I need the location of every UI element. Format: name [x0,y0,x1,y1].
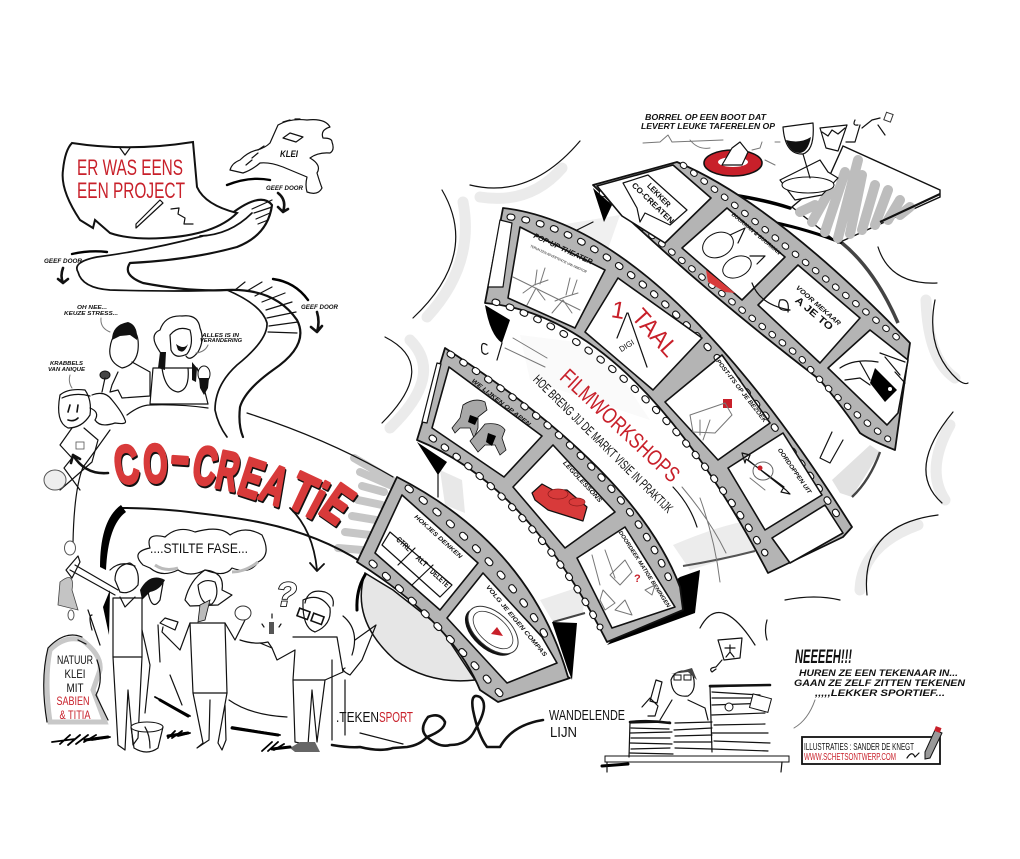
map of the netherlands: KLEI [280,149,298,159]
borrel on boat text and lifebuoy: LEVERT LEUKE TAFERELEN OP [641,122,776,131]
film strip 1: hokjes denken and compas [357,477,577,702]
borrel on boat text and lifebuoy: BORREL OP EEN BOOT DAT [645,113,767,122]
frame: volg je eigen compas [447,573,557,683]
labels near top people: OH NEE... [77,305,108,311]
heading: co-creatie: i [299,472,336,530]
anique figure [44,390,126,543]
frame: hokjes denken ctrl alt delete [375,495,478,610]
wandering line [332,696,543,750]
map of the netherlands [230,119,333,193]
neeeeh text block: HUREN ZE EEN TEKENAAR IN... [799,668,958,678]
frame: we lijken op apen [432,367,542,477]
heading: co-creatie: O [142,434,169,495]
frame: 1 taal digi [585,278,702,390]
top people with microphones [100,316,210,415]
heading: co-creatie [110,425,364,535]
neeeeh text block: ,,,,,LEKKER SPORTIEF... [814,688,945,698]
credits box: WWW.SCHETSONTWERP.COM [804,752,896,763]
heading: co-creatie: - [169,425,192,486]
figure: woman with apron and light bulb [58,541,142,750]
clay sign: natuur klei: & TITIA [60,708,90,722]
neeeeh text block: NEEEEH!!! [795,647,852,668]
paper flag with grey drips [792,146,940,243]
frame: speech bubble lekker co-createn: LEKKER [645,181,673,209]
title: er was eens een project: ER WAS EENS [77,155,183,180]
heading: co-creatie: R [211,440,245,503]
figure: woman behind with dark hair [140,578,165,713]
film strip 4: lekker co-creeren [593,162,910,450]
frame: buurman en buurman: BUURMAN & BUURMAN [730,212,782,257]
arch line and arrow below heading [90,505,363,635]
clay sign: natuur klei [44,635,108,722]
title: er was eens een project: EEN PROJECT [77,178,185,203]
heading: co-creatie: T [279,460,327,526]
geef door labels and arrows: GEEF DOOR [44,259,83,265]
labels near top people: ALLES IS IN [201,333,240,339]
ground strokes [52,610,345,751]
frame: pop-up theater [508,227,605,328]
neeeeh text block: GAAN ZE ZELF ZITTEN TEKENEN [794,678,966,688]
clay sign: natuur klei: SABIEN [56,694,90,708]
geef door labels and arrows: GEEF DOOR [301,305,339,311]
frame: hokjes denken ctrl alt delete: DELETE [428,567,452,590]
label: wandelende lijn [549,707,625,741]
frame: buurman en buurman [682,208,785,300]
brush strokes beside co-creatie [338,458,392,550]
title: er was eens een project [77,155,185,203]
frame: white strip end [772,505,843,563]
frame: lego: LEGOLESSONS [561,461,602,504]
labels near top people: VAN ANIQUE [48,367,85,373]
neeeeh text block [794,647,966,728]
frame: 1 taal digi: DIGI [618,338,636,354]
frame: post-its: POST-ITS OP JE BEZOEK [714,359,768,425]
clay sign: natuur klei: NATUUR [57,653,93,667]
label: wandelende lijn: LIJN [550,724,577,741]
blob body with shading [357,195,898,681]
frame: pop-up theater: POP-UP THEATER [532,231,594,267]
frame: hand with phone [828,330,908,425]
thought cloud: stilte fase: ....STILTE FASE... [150,540,248,556]
frame: doordeek matige bewegingen: ? [634,573,641,585]
heading: co-creatie: C [110,433,143,497]
film strip 3: pop-up theater and 1 taal [485,208,852,573]
background arcs [382,141,968,645]
borrel on boat text and lifebuoy [641,113,780,176]
label: tekensport: .TEKEN [336,709,379,726]
labels near top people: KEUZE STRESS... [64,311,119,317]
frame: lego [513,445,615,548]
labels near top people [48,305,243,388]
frame: oordoppen uit: OORDOPPEN UIT [776,448,813,496]
geef door labels and arrows: GEEF DOOR [266,186,304,192]
frame: speech bubble lekker co-createn: CO-CREATEN [630,181,676,226]
frame: voor mekaar a je to: A JE TO [792,295,835,333]
heading: co-creatie: E [310,473,364,535]
figure: man with glasses and question mark: ? [276,576,297,614]
frame: we lijken op apen: WE LIJKEN OP APEN [470,378,532,429]
subheading: hoe breng jij de markt visie in praktijk: HOE BRENG JIJ DE MARKT VISIE IN PRAKTIJK [530,372,676,516]
frame: 1 taal digi: TAAL [626,304,683,362]
figure: man with glasses and question mark [240,576,376,752]
heading: co-creatie: C [188,435,222,498]
desk with paper stacks and artist [602,638,789,772]
paper scroll [63,142,237,238]
heading: co-creatie: A [253,454,297,518]
thought cloud: stilte fase [138,529,266,574]
credits box: ILLUSTRATIES : SANDER DE KNEGT [804,742,914,753]
clay sign: natuur klei: KLEI [64,667,86,681]
frame: volg je eigen compas: VOLG JE EIGEN COMPAS [484,585,547,658]
bucket [131,722,163,752]
glasses and bottle [780,112,893,200]
frame: doordeek matige bewegingen [577,527,675,628]
frame: post-its [665,355,770,460]
frame: speech bubble lekker co-createn [597,165,711,243]
credits box [802,726,942,764]
labels near top people: VERANDERING [200,338,243,344]
frame: doordeek matige bewegingen: DOORDEEK MATIGE BENINGEN [617,530,671,610]
label: tekensport: SPORT [379,709,413,726]
frame: pop-up theater: TERUN EEN ADVERTENTIE VAN INMOTOR [529,244,588,274]
heading: co-creatie: E [232,448,271,511]
frame: 1 taal digi: 1 [609,296,627,325]
geef door labels and arrows [44,179,339,332]
label: wandelende lijn: WANDELENDE [549,707,625,724]
frame: oordoppen uit [728,433,822,530]
frame: voor mekaar a je to [752,265,860,363]
clay sign: natuur klei: MIT [66,681,84,695]
frame: hokjes denken ctrl alt delete: CTRL [394,535,413,553]
frame: hokjes denken ctrl alt delete: HOKJES DENKEN [413,514,463,561]
frame: voor mekaar a je to: VOOR MEKAAR [794,285,842,327]
frame: hokjes denken ctrl alt delete: ALT [414,553,430,569]
film strip 2: filmworkshops frames [417,348,700,645]
road: winding path from paper [77,200,393,477]
labels near top people: KRABBELS [50,361,83,367]
heading: filmworkshops: FILMWORKSHOPS [555,364,685,487]
figure: woman in dress thinking [160,570,251,750]
